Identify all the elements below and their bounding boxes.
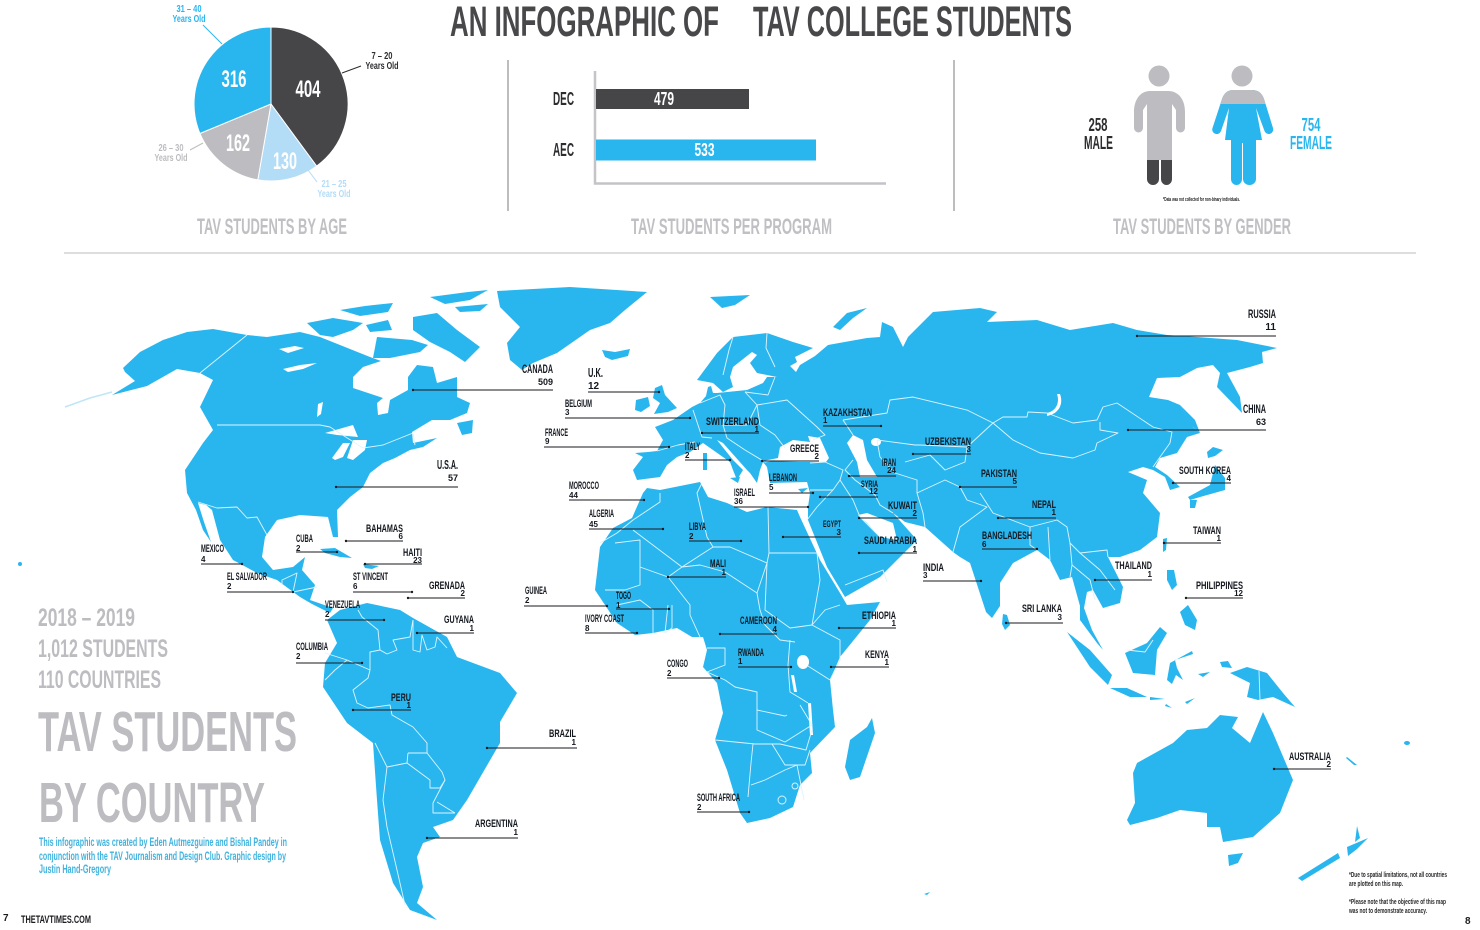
heading: per program: TAV STUDENTS PER PROGRAM — [631, 214, 832, 239]
label: Kazakhstan: KAZAKHSTAN — [823, 407, 872, 419]
label: Canada: 509 — [538, 377, 553, 387]
callout: 31-40 years old: Years Old — [172, 13, 206, 25]
heading: students by country — [38, 700, 297, 835]
heading: by age: TAV STUDENTS BY AGE — [197, 214, 347, 239]
credits text: This infographic was created by Eden Autmezguine and Bishal Pandey in — [39, 837, 287, 849]
label: Cameroon — [719, 615, 778, 635]
tasmania — [1228, 853, 1243, 866]
pie values: 162 — [226, 130, 250, 157]
female count: 754 — [1302, 115, 1320, 135]
heading: students by country: TAV STUDENTS — [38, 700, 297, 764]
mediterranean islands — [703, 453, 808, 493]
label: UK: U.K. — [588, 365, 603, 380]
footer: page 7 and website: THETAVTIMES.COM — [21, 914, 91, 926]
label: St Vincent: 6 — [353, 582, 358, 591]
label: Haiti: HAITI — [403, 547, 422, 559]
label: Lebanon — [769, 472, 814, 494]
label: Russia — [1136, 307, 1276, 337]
label: Guinea — [524, 585, 608, 607]
label: Libya — [689, 521, 742, 542]
label: Belgium: 3 — [565, 408, 570, 417]
label: Greece: 2 — [815, 452, 820, 461]
label: Ivory Coast: 8 — [585, 624, 590, 633]
female count — [1290, 115, 1332, 153]
label: Philippines: PHILIPPINES — [1196, 580, 1243, 592]
label: Italy: 2 — [685, 451, 690, 460]
label: Peru — [352, 692, 412, 711]
label: St Vincent: ST VINCENT — [353, 571, 388, 583]
callout: 26-30 years old — [154, 142, 203, 164]
great britain — [653, 385, 677, 414]
label: Greece: GREECE — [790, 443, 819, 455]
label: Egypt: EGYPT — [823, 519, 841, 529]
label: Sri Lanka: SRI LANKA — [1022, 603, 1062, 615]
label: Cameroon: CAMEROON — [740, 615, 777, 627]
label: Sri Lanka — [1005, 603, 1063, 624]
label: Egypt — [782, 519, 842, 538]
label: Belgium: BELGIUM — [565, 398, 592, 410]
label: Guinea: 2 — [525, 596, 530, 605]
label: France: 9 — [545, 437, 550, 446]
label: Haiti — [364, 547, 423, 565]
label: Switzerland: SWITZERLAND — [706, 416, 759, 428]
world map — [18, 287, 1410, 920]
callout: 7-20 years old — [342, 50, 398, 73]
divider — [953, 60, 955, 211]
panel: map summary statistics: 1,012 STUDENTS — [38, 635, 168, 663]
label: Morocco — [569, 480, 645, 501]
label: Bangladesh: 6 — [982, 540, 987, 549]
label: Cuba — [296, 533, 338, 553]
divider — [507, 60, 509, 211]
label: South Korea: SOUTH KOREA — [1179, 465, 1231, 477]
label: Bangladesh — [982, 530, 1038, 550]
label: Columbia: COLUMBIA — [296, 641, 328, 653]
label: Kenya: KENYA — [865, 649, 889, 661]
label: Bahamas — [345, 523, 404, 542]
japan — [1188, 447, 1225, 508]
map: inland seas and lakes — [279, 346, 1061, 735]
label: Nepal: NEPAL — [1032, 499, 1056, 511]
footnotes — [1348, 872, 1447, 915]
novaya zemlya — [833, 308, 867, 330]
label: USA: U.S.A. — [437, 457, 458, 472]
label: USA: 57 — [448, 473, 458, 483]
heading: by gender: TAV STUDENTS BY GENDER — [1113, 214, 1291, 239]
label: Russia: 11 — [1265, 322, 1276, 333]
label: Nepal: 1 — [1052, 508, 1057, 517]
label: Syria: SYRIA — [861, 479, 878, 489]
panel: map summary statistics — [38, 604, 168, 694]
label: Ethiopia — [838, 610, 897, 629]
label: Kuwait: 2 — [913, 509, 918, 518]
callout: 31-40 years old: 31 – 40 — [176, 3, 202, 15]
male count: MALE — [1084, 133, 1113, 153]
map: country borders — [198, 333, 1260, 905]
label: Congo: CONGO — [667, 658, 688, 670]
female count: FEMALE — [1290, 133, 1332, 153]
callout: 7-20 years old: 7 – 20 — [372, 50, 393, 62]
callout: 21-25 years old: Years Old — [318, 188, 350, 200]
label: South Korea: 4 — [1227, 474, 1232, 483]
label: Columbia: 2 — [296, 652, 301, 661]
label: India — [923, 562, 982, 582]
label: Syria: 12 — [869, 487, 879, 496]
label: Rwanda: 1 — [738, 657, 743, 666]
label: Morocco: 44 — [569, 491, 578, 500]
label: China — [1127, 402, 1266, 431]
label: Uzbekistan: UZBEKISTAN — [925, 436, 971, 448]
map: landmasses — [18, 287, 1410, 920]
label: Canada — [412, 362, 553, 391]
bar chart: AEC — [553, 140, 574, 160]
label: Israel — [734, 487, 809, 508]
label: Italy: ITALY — [685, 441, 700, 453]
label: Libya: 2 — [689, 532, 694, 541]
credits text: conjunction with the TAV Journalism and Design Club. Graphic design by — [39, 851, 286, 863]
label: Iran — [848, 457, 897, 477]
label: India: 3 — [923, 571, 928, 580]
north america — [112, 329, 470, 613]
credits text: Justin Hand-Gregory — [39, 864, 111, 876]
label: Egypt: 3 — [837, 528, 842, 537]
label: Pakistan — [959, 468, 1018, 488]
icon: female figure — [1212, 66, 1273, 185]
label: Guyana — [416, 614, 475, 634]
label: Grenada — [407, 580, 466, 599]
label: Saudi Arabia: 1 — [913, 545, 918, 554]
icon: male figure — [1134, 66, 1185, 185]
label: Congo — [667, 658, 720, 679]
label: Kuwait: KUWAIT — [888, 500, 917, 512]
label: Australia: AUSTRALIA — [1289, 751, 1331, 763]
label: South Korea — [1172, 465, 1232, 484]
label: St Vincent — [353, 571, 413, 593]
label: Ethiopia: 1 — [892, 619, 897, 628]
bar chart: DEC — [553, 89, 574, 109]
map labels — [201, 307, 1332, 839]
label: Algeria: 45 — [589, 520, 598, 529]
callout: 26-30 years old: Years Old — [154, 152, 188, 164]
southeast asia islands — [1230, 667, 1295, 707]
label: Australia: 2 — [1327, 760, 1332, 769]
label: Brazil: BRAZIL — [549, 728, 576, 740]
label: Venezuela: VENEZUELA — [325, 599, 360, 611]
label: UK: 12 — [588, 381, 600, 392]
label: Argentina: ARGENTINA — [475, 818, 518, 830]
label: Australia — [1273, 751, 1332, 770]
new zealand — [1298, 826, 1368, 881]
label: China: CHINA — [1243, 402, 1266, 416]
aleutian islands — [65, 392, 112, 407]
greenland and arctic islands — [497, 287, 647, 370]
label: Philippines: 12 — [1234, 589, 1244, 598]
divider — [64, 252, 1416, 254]
label: Morocco: MOROCCO — [569, 480, 599, 492]
label: Mexico: 4 — [201, 555, 206, 564]
label: France — [544, 427, 670, 448]
label: Kazakhstan: 1 — [823, 416, 828, 425]
label: Guyana: GUYANA — [444, 614, 474, 626]
label: South Africa: 2 — [697, 803, 702, 812]
pie chart — [194, 27, 348, 181]
eurasia — [633, 308, 1277, 650]
label: Belgium — [565, 398, 691, 419]
label: UK — [588, 365, 660, 393]
label: South Africa — [697, 792, 750, 813]
label: Switzerland: 1 — [755, 425, 760, 434]
label: Mexico — [201, 543, 243, 565]
taiwan — [1163, 538, 1167, 552]
label: Venezuela: 2 — [325, 610, 330, 619]
label: Kazakhstan — [823, 407, 882, 427]
panel: students per program — [553, 71, 886, 239]
label: Algeria — [589, 508, 664, 530]
label: Saudi Arabia: SAUDI ARABIA — [864, 535, 917, 547]
label: Guyana: 1 — [470, 624, 475, 633]
label: Greece — [761, 443, 820, 462]
bar chart — [553, 71, 886, 184]
label: France: FRANCE — [545, 427, 568, 439]
label: Canada: CANADA — [522, 362, 553, 376]
label: Thailand: 1 — [1148, 570, 1153, 579]
label: Kuwait — [858, 500, 918, 519]
label: Bangladesh: BANGLADESH — [982, 530, 1032, 542]
label: Pakistan: 5 — [1013, 477, 1018, 486]
label: China: 63 — [1256, 417, 1266, 427]
pie values — [222, 66, 321, 175]
label: Uzbekistan — [912, 436, 972, 455]
bar chart: 533 — [694, 140, 714, 160]
heading: students by country: BY COUNTRY — [39, 771, 265, 835]
label: El Salvador: EL SALVADOR — [227, 571, 267, 583]
label: Columbia — [296, 641, 363, 664]
label: Haiti: 23 — [413, 556, 423, 565]
pie values: 316 — [222, 66, 246, 93]
label: India: INDIA — [923, 562, 944, 574]
label: Congo: 2 — [667, 669, 672, 678]
label: Saudi Arabia — [858, 535, 918, 554]
label: Uzbekistan: 3 — [967, 445, 972, 454]
footer: page 8: 8 — [1465, 916, 1471, 927]
label: Argentina: 1 — [514, 828, 519, 837]
label: Philippines — [1185, 580, 1244, 599]
label: Libya: LIBYA — [689, 521, 706, 533]
footnotes: was not to demonstrate accuracy. — [1348, 908, 1427, 915]
label: Italy — [685, 441, 731, 461]
svalbard — [710, 295, 750, 308]
label: Cuba: CUBA — [296, 533, 313, 545]
panel: map summary statistics: 2018 – 2019 — [38, 604, 135, 632]
label: Taiwan: TAIWAN — [1193, 525, 1221, 537]
pie values: 130 — [273, 148, 297, 175]
male count: 258 — [1088, 115, 1108, 135]
label: Algeria: ALGERIA — [589, 508, 614, 520]
label: Kenya: 1 — [885, 658, 890, 667]
label: Brazil — [486, 728, 577, 749]
callout: 31-40 years old — [172, 3, 222, 44]
label: El Salvador — [227, 571, 294, 593]
pie values: 404 — [296, 76, 321, 103]
label: Togo: TOGO — [616, 590, 631, 602]
label: South Africa: SOUTH AFRICA — [697, 792, 740, 804]
sri lanka — [1002, 614, 1010, 630]
label: Lebanon: 5 — [769, 483, 774, 492]
callout: 21-25 years old — [308, 170, 350, 200]
male count — [1084, 115, 1113, 153]
label: Iran: IRAN — [882, 457, 896, 469]
label: Ethiopia: ETHIOPIA — [862, 610, 896, 622]
panel: map summary statistics: 110 COUNTRIES — [38, 666, 161, 694]
label: Rwanda — [738, 647, 792, 668]
callout: 21-25 years old: 21 – 25 — [322, 178, 347, 190]
label: Guinea: GUINEA — [525, 585, 547, 597]
label: Taiwan: 1 — [1217, 534, 1222, 543]
footer: page 7 and website — [3, 913, 91, 926]
label: Iran: 24 — [887, 466, 897, 475]
label: Peru: PERU — [391, 692, 411, 704]
label: Russia: RUSSIA — [1248, 307, 1276, 321]
label: Mali: MALI — [710, 558, 726, 570]
caribbean — [320, 548, 379, 569]
panel: students by age — [154, 3, 398, 239]
label: Rwanda: RWANDA — [738, 647, 764, 659]
panel: students by gender — [1084, 66, 1332, 239]
label: Thailand: THAILAND — [1115, 560, 1152, 572]
label: Venezuela — [325, 599, 385, 621]
small islands — [18, 562, 22, 566]
callout: 26-30 years old: 26 – 30 — [158, 142, 184, 154]
label: Syria — [819, 479, 879, 498]
label: Thailand — [1094, 560, 1153, 581]
label: Ivory Coast: IVORY COAST — [585, 613, 624, 625]
south america — [323, 603, 517, 920]
label: Israel: 36 — [734, 497, 743, 506]
label: Bahamas: BAHAMAS — [366, 523, 403, 535]
footer: page 7 and website: 7 — [3, 913, 9, 924]
label: Cuba: 2 — [296, 544, 301, 553]
label: Argentina — [426, 818, 519, 839]
label: Cameroon: 4 — [773, 625, 778, 634]
ireland — [635, 397, 650, 412]
label: Peru: 1 — [407, 701, 412, 710]
label: Grenada: 2 — [461, 589, 466, 598]
africa — [595, 482, 880, 823]
label: Togo: 1 — [616, 601, 621, 610]
label: Pakistan: PAKISTAN — [981, 468, 1017, 480]
label: Nepal — [997, 499, 1057, 519]
label: Togo — [616, 590, 670, 610]
label: USA — [335, 457, 458, 488]
label: Taiwan — [1163, 525, 1222, 544]
label: El Salvador: 2 — [227, 582, 232, 591]
label: Brazil: 1 — [572, 738, 577, 747]
label: Sri Lanka: 3 — [1058, 613, 1063, 622]
madagascar — [845, 718, 875, 780]
label: Mali: 1 — [722, 568, 727, 577]
label: Mali — [667, 558, 727, 578]
callout: 7-20 years old: Years Old — [366, 60, 398, 72]
label: Bahamas: 6 — [399, 532, 404, 541]
australia — [1127, 712, 1293, 842]
label: Lebanon: LEBANON — [769, 472, 797, 484]
note: non-binary data: *Data was not collected for non-binary individuals. — [1163, 197, 1240, 203]
label: Switzerland — [701, 416, 760, 434]
newfoundland — [457, 420, 473, 435]
label: Mexico: MEXICO — [201, 543, 224, 555]
label: Ivory Coast — [585, 613, 638, 634]
sakhalin — [1180, 405, 1200, 433]
credits text — [39, 837, 287, 876]
label: Israel: ISRAEL — [734, 487, 755, 499]
bar chart: 479 — [654, 89, 674, 109]
footnotes: are plotted on this map. — [1349, 881, 1403, 888]
label: Kenya — [830, 649, 890, 668]
iceland — [602, 349, 630, 360]
label: Grenada: GRENADA — [429, 580, 465, 592]
